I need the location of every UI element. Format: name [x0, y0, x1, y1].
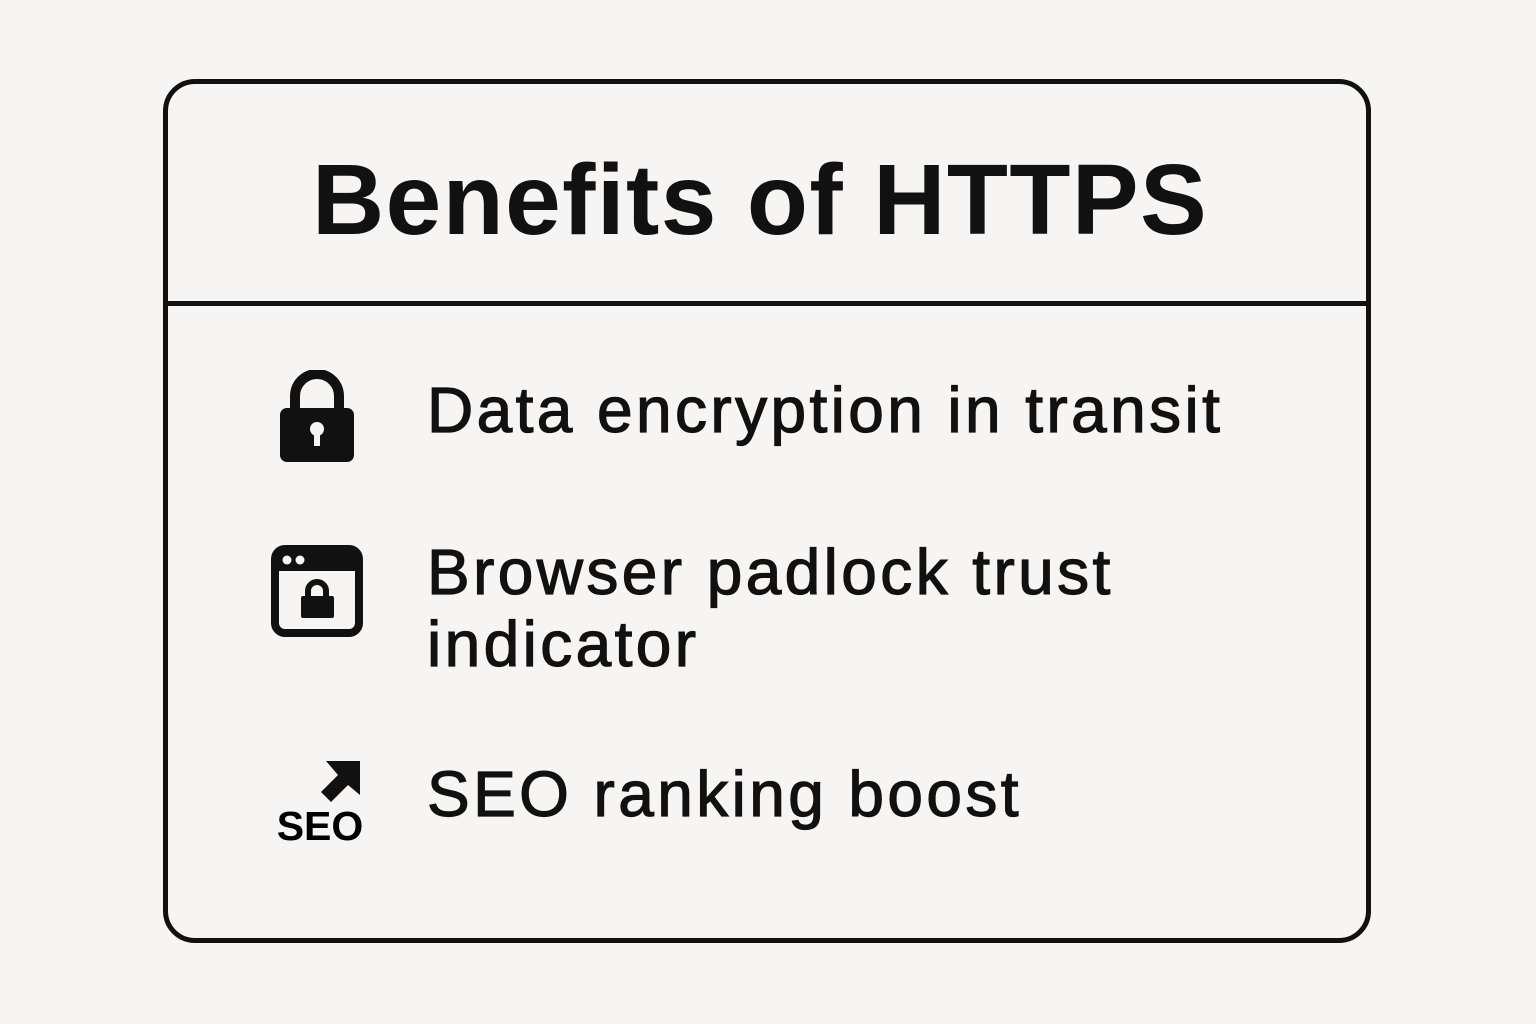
- icon: SEO boost: [277, 761, 363, 844]
- text: browser padlock: Browser padlock trust: [427, 536, 1114, 608]
- text: browser padlock: indicator: [427, 608, 700, 680]
- text: data encryption: Data encryption in transit: [427, 374, 1223, 446]
- text: browser padlock: [427, 536, 1114, 680]
- icon: browser padlock: [271, 545, 363, 637]
- title: Benefits of HTTPS: [312, 144, 1208, 256]
- panel: main card: [163, 79, 1371, 943]
- text: SEO: SEO ranking boost: [427, 758, 1022, 830]
- divider: [168, 301, 1366, 306]
- icon: lock: [280, 370, 354, 462]
